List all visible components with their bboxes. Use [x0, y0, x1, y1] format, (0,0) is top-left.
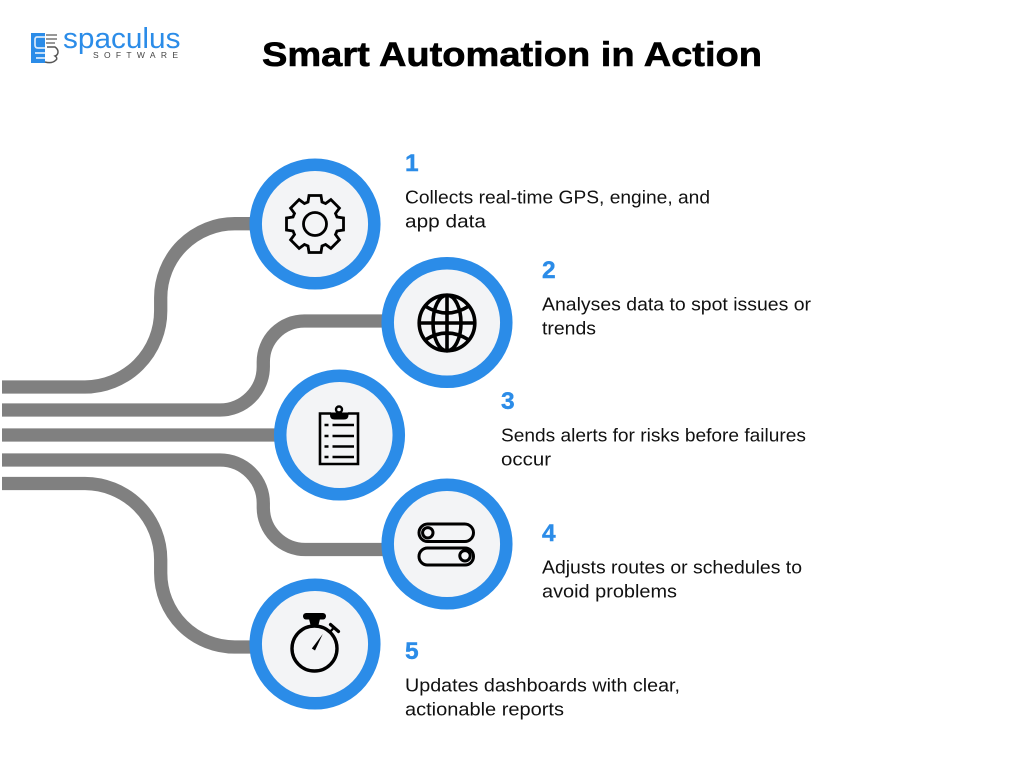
icon: clipboard	[320, 405, 358, 464]
circle: step 2	[388, 263, 506, 382]
step 3 text: Sends alerts for risks before failures	[501, 426, 806, 446]
step 5 text	[405, 638, 680, 720]
step 3 text: 3	[501, 388, 515, 415]
step 2 text: Analyses data to spot issues or	[542, 294, 811, 314]
step 3 text	[501, 388, 806, 470]
logo: spaculus software	[31, 23, 180, 63]
circle: step 5	[256, 585, 374, 703]
icon: gear	[286, 196, 344, 252]
connector: path to step 1	[2, 224, 255, 387]
step 4 text: 4	[542, 520, 556, 547]
step 2 text: trends	[542, 318, 596, 338]
step 5 text: actionable reports	[405, 700, 564, 720]
step 3 text: occur	[501, 450, 551, 470]
step 2 text	[542, 257, 811, 338]
step 4 text	[542, 520, 802, 602]
step 5 text: 5	[405, 638, 419, 665]
step 4 text: avoid problems	[542, 582, 677, 602]
icon: stopwatch	[292, 613, 338, 671]
step 5 text: Updates dashboards with clear,	[405, 676, 680, 696]
circle: step 3	[280, 376, 399, 494]
circle: step 1	[256, 165, 374, 283]
icon: toggle switches	[419, 524, 474, 565]
connector: path to step 2	[2, 321, 390, 410]
connector: path to step 4	[2, 460, 390, 550]
step 1 text	[405, 150, 710, 232]
connector: path to step 3	[2, 428, 280, 442]
step 4 text: Adjusts routes or schedules to	[542, 558, 802, 578]
step 2 text: 2	[542, 257, 556, 284]
logo: spaculus software: spaculus	[63, 23, 180, 55]
step 1 text: app data	[405, 212, 487, 232]
logo: spaculus software: SOFTWARE	[93, 50, 178, 60]
step 1 text: Collects real-time GPS, engine, and	[405, 188, 710, 208]
step 1 text: 1	[405, 150, 419, 177]
icon: globe	[419, 295, 475, 351]
circle: step 4	[388, 485, 506, 603]
connector: path to step 5	[2, 484, 255, 647]
title: Smart Automation in Action	[262, 36, 762, 74]
